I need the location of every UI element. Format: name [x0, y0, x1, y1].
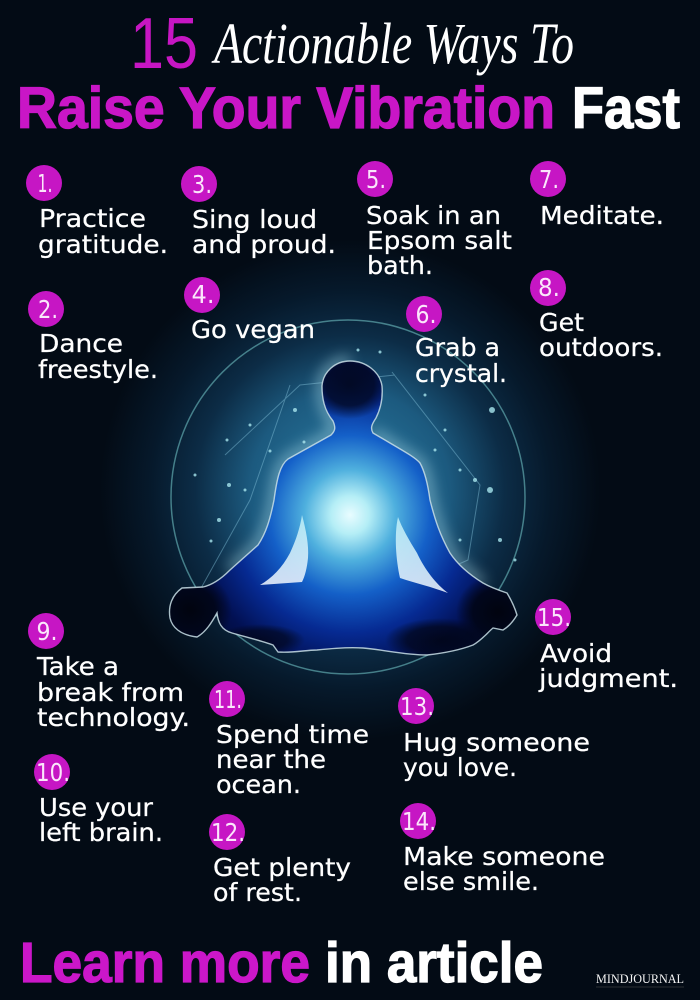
item 15: judgment.: [538, 664, 678, 693]
item 9: technology.: [37, 703, 190, 732]
meditating figure silhouette: [168, 350, 518, 656]
item 11: Spend time: [216, 720, 369, 749]
item 15: 15.: [537, 603, 571, 632]
item 9: Take a: [36, 652, 119, 681]
item 3: 3.: [192, 170, 212, 199]
item 2: [28, 291, 158, 384]
item 10: left brain.: [39, 818, 163, 847]
item 6: Grab a: [415, 333, 500, 362]
item 13: [398, 688, 590, 782]
item 5: Soak in an: [366, 201, 501, 230]
logo: MindJournal: MINDJOURNAL: [596, 971, 684, 986]
item 14: else smile.: [403, 867, 539, 896]
title line one: [130, 4, 574, 84]
footer call to action: in article: [325, 931, 543, 995]
item 7: 7.: [539, 165, 559, 194]
item 4: 4.: [192, 280, 214, 309]
item 1: gratitude.: [38, 230, 168, 259]
item 5: 5.: [366, 165, 386, 194]
item 11: [209, 681, 369, 799]
item 4: Go vegan: [191, 315, 315, 344]
item 4: [184, 277, 315, 344]
item 13: you love.: [403, 753, 517, 782]
body: [170, 361, 517, 655]
title line one: 15: [130, 4, 198, 84]
item 3: Sing loud: [192, 205, 317, 234]
item 8: outdoors.: [539, 333, 663, 362]
item 12: Get plenty: [213, 853, 351, 882]
item 3: and proud.: [192, 230, 336, 259]
item 5: [357, 161, 512, 280]
item 7: Meditate.: [540, 201, 664, 230]
item 1: [26, 165, 168, 259]
title line two: Raise Your Vibration: [17, 76, 555, 141]
item 12: of rest.: [213, 878, 302, 907]
item 12: [209, 814, 351, 907]
item 3: [181, 166, 336, 259]
figure outline: [170, 361, 517, 655]
item 14: Make someone: [403, 842, 605, 871]
item 13: 13.: [400, 692, 434, 721]
item 8: [530, 270, 663, 362]
item 10: Use your: [39, 793, 154, 822]
item 8: 8.: [538, 273, 560, 302]
item 1: Practice: [39, 204, 146, 233]
dark hands and head shading: [148, 351, 540, 662]
item 7: [530, 161, 664, 230]
item 2: Dance: [39, 329, 123, 358]
item 10: 10.: [36, 758, 70, 787]
title line one: Actionable Ways To: [211, 11, 574, 76]
item 1: 1.: [38, 169, 52, 198]
footer call to action: [20, 931, 543, 995]
item 11: near the: [216, 745, 326, 774]
item 14: 14.: [402, 807, 436, 836]
title line two: Fast: [572, 76, 680, 141]
item 6: crystal.: [415, 359, 507, 388]
item 2: 2.: [38, 295, 58, 324]
item 6: [406, 296, 507, 388]
item 15: Avoid: [540, 639, 612, 668]
arm gap right: [396, 517, 448, 593]
item 11: 11.: [214, 685, 242, 714]
item 9: break from: [37, 678, 184, 707]
item 5: bath.: [367, 251, 433, 280]
item 5: Epsom salt: [367, 226, 512, 255]
item 13: Hug someone: [403, 728, 590, 757]
item 14: [400, 803, 605, 896]
arm gap left: [260, 515, 308, 585]
item 6: 6.: [416, 300, 436, 329]
cosmic glow with ring and stars: [90, 240, 610, 740]
soft halo around figure: [230, 361, 483, 583]
item 2: freestyle.: [38, 355, 158, 384]
item 11: ocean.: [216, 770, 301, 799]
item 10: [34, 754, 163, 847]
item 15: [535, 599, 678, 693]
item 12: 12.: [211, 818, 245, 847]
item 8: Get: [539, 308, 584, 337]
item 9: 9.: [36, 617, 58, 646]
item 9: [28, 613, 190, 732]
footer call to action: Learn more: [20, 931, 310, 995]
